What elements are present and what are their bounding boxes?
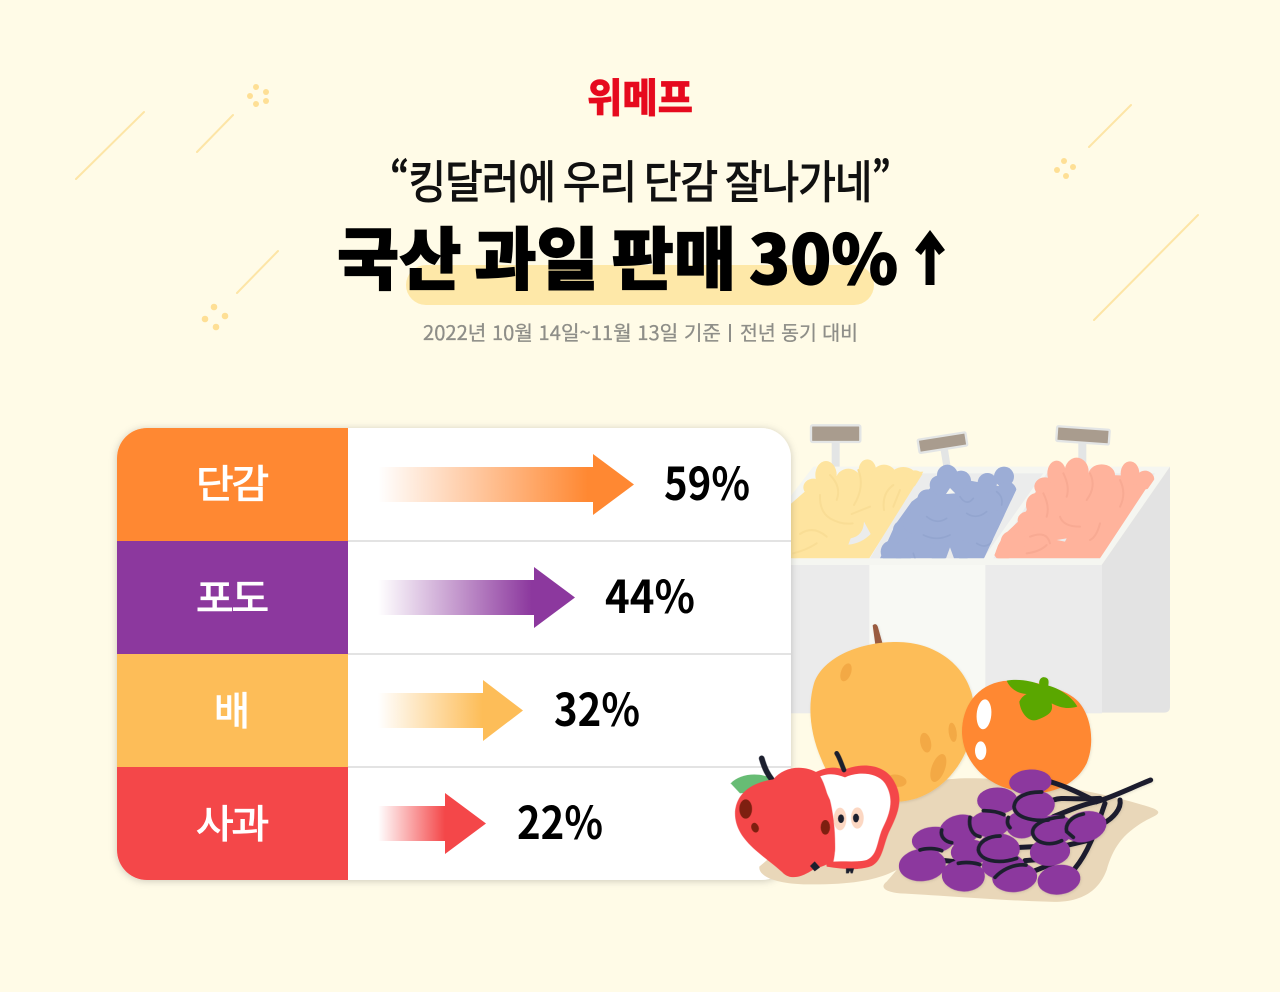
subtitle quote: “킹달러에 우리 단감 잘나가네” [390,146,890,211]
headline: 국산 과일 판매 30% [337,205,898,304]
row: grape: 44% [605,561,695,626]
stall body [780,467,1170,713]
date note [423,317,858,346]
illustration: fruit still life [731,624,1158,902]
pile: salmon persimmons [993,458,1154,560]
row: grape [117,541,695,654]
row: persimmon [117,428,750,541]
date note: 2022년 10월 14일~11월 13일 기준 [423,317,721,346]
persimmon [962,677,1091,793]
cloth [759,778,1158,902]
whole apple [731,758,835,877]
row: apple: 22% [517,787,603,852]
icon: up arrow [915,230,945,285]
headline highlight [406,265,874,305]
table [117,428,791,880]
logo: WeMakePrice: 위메프 [587,66,693,124]
stall price signs [811,425,1110,470]
pile: blue grapes [880,464,1016,558]
grapes [898,769,1109,896]
row dividers [348,541,791,767]
row: pear: 32% [554,674,640,739]
row: pear [117,654,640,767]
row: pear: 배 [214,681,250,737]
row: apple [117,767,603,880]
row: apple: 사과 [196,794,268,850]
date note: 전년 동기 대비 [740,317,858,346]
grapes stems [945,780,1151,871]
illustration: fruit market stall [778,425,1170,713]
decorative lines and dots [76,84,1198,330]
apple half [813,753,899,873]
row: grape: 포도 [196,568,267,624]
pile: yellow pears [778,459,924,558]
pear [810,624,974,802]
row: persimmon: 단감 [196,454,268,510]
grape outlines [920,792,1083,877]
row: persimmon: 59% [664,448,750,513]
